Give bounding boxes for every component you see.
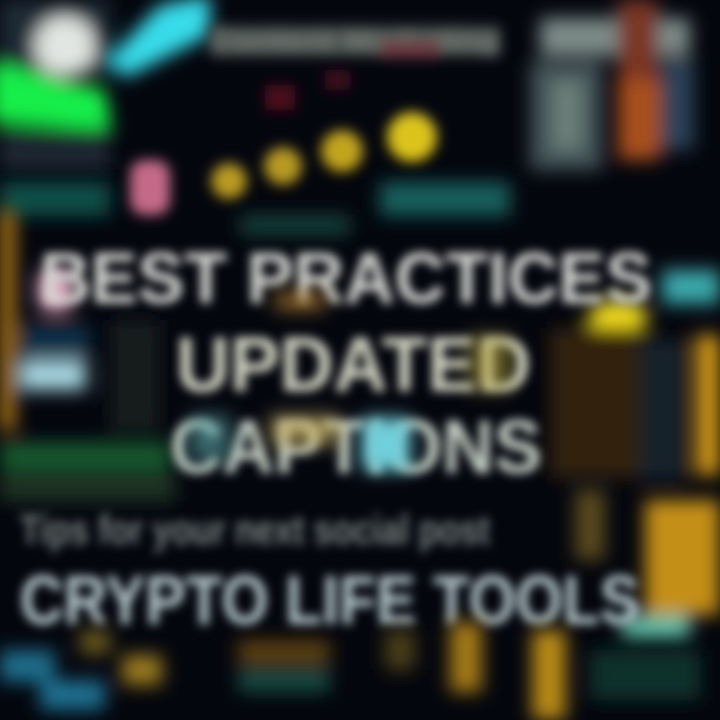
- text block: bottom headline: CRYPTO LIFE TOOLS: [20, 561, 640, 639]
- panel: teal bands: [0, 182, 510, 235]
- heading: top title bar: Content Marketing: [210, 25, 500, 56]
- panel: right side accents: [550, 270, 720, 639]
- panel: bottom accents: [0, 622, 700, 720]
- panel: top right columns: [530, 0, 694, 170]
- heading: main headline: BEST PRACTICES: [40, 239, 652, 319]
- heading: main headline: UPDATED: [176, 320, 531, 408]
- text block: subtitle line: Tips for your next social post: [20, 506, 490, 553]
- heading: main headline: [40, 239, 652, 490]
- panel: top left logo area: [0, 0, 210, 170]
- heading: main headline: CAPTIONS: [170, 405, 542, 490]
- headline colour highlights: [190, 292, 510, 470]
- chart: rising dots: [130, 70, 437, 215]
- panel: left side accents: [0, 210, 175, 502]
